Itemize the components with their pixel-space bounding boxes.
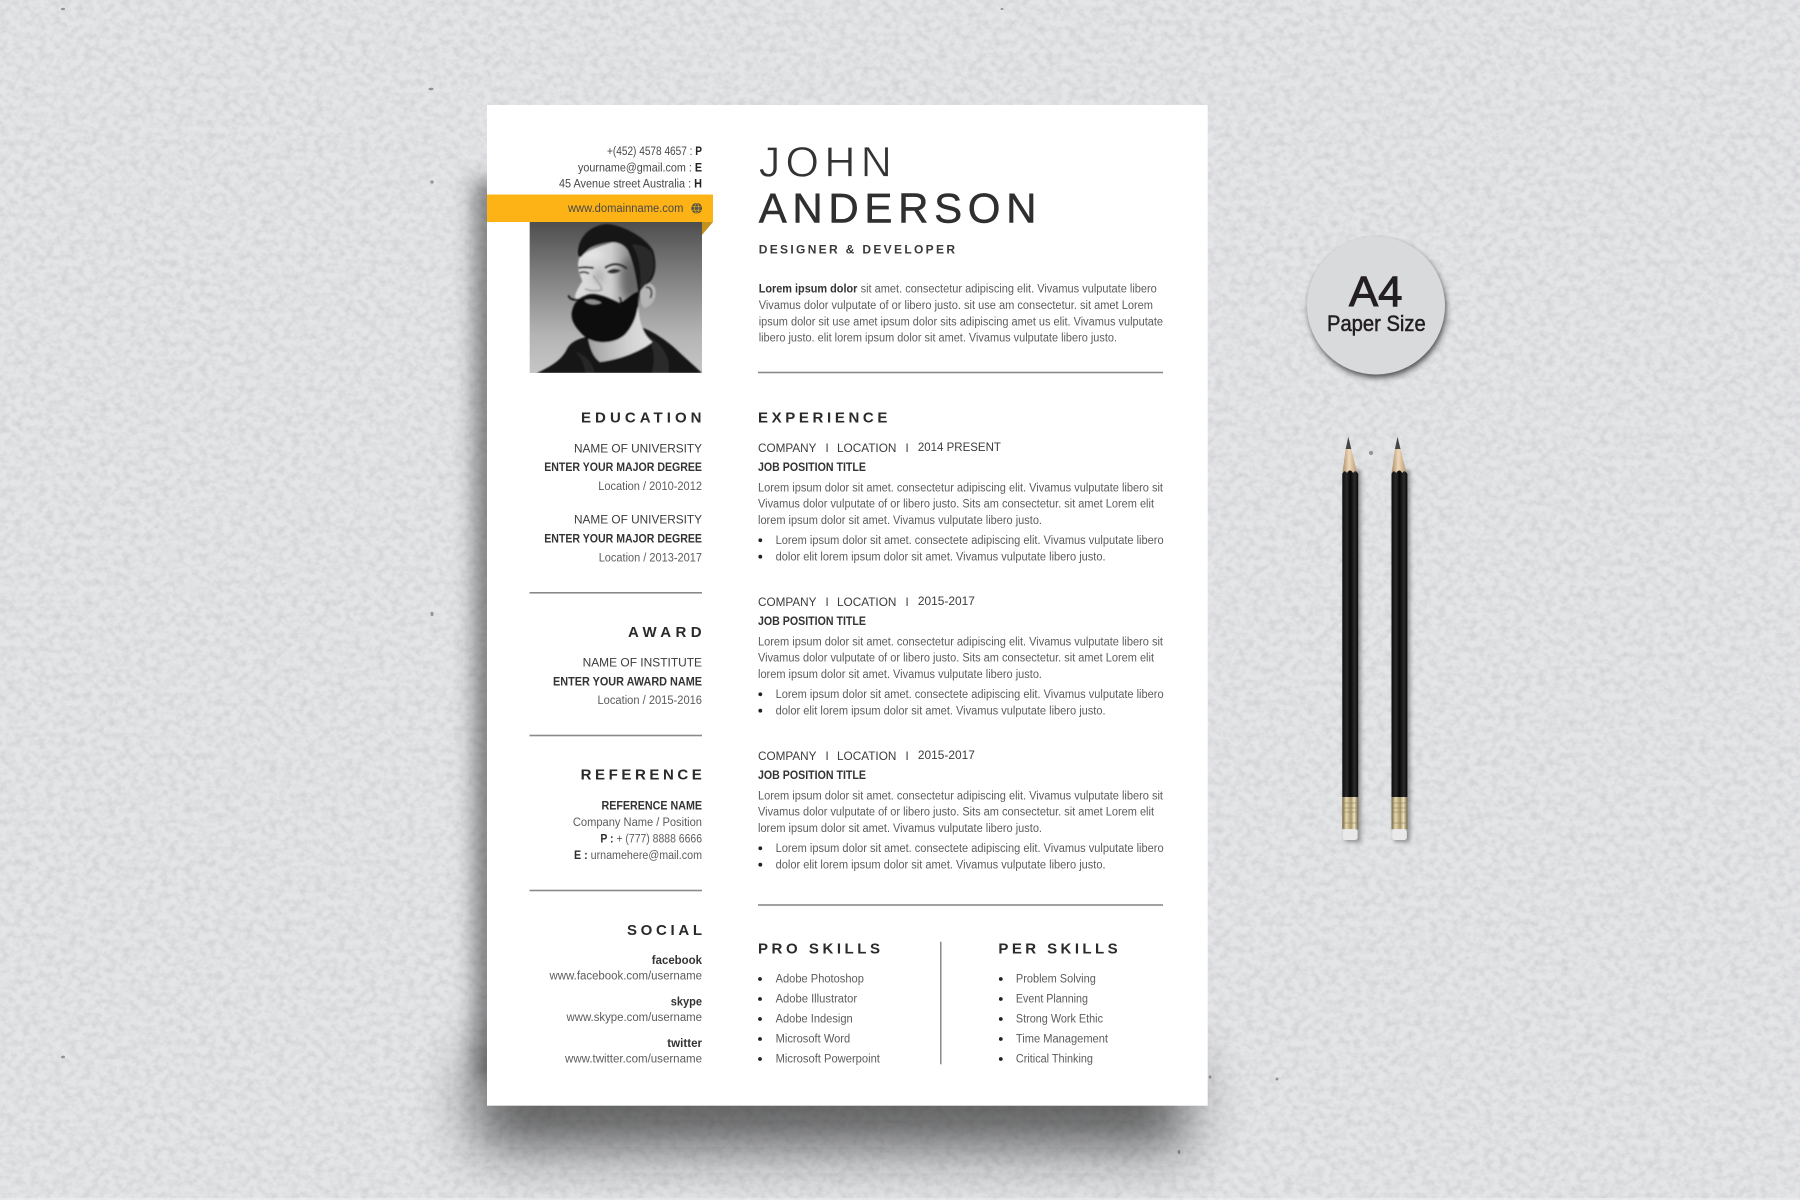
experience entry 3: dolor elit lorem ipsum dolor sit amet. Vivamus vulputate libero justo. <box>776 859 1106 871</box>
per skills list: Critical Thinking <box>1016 1054 1093 1066</box>
social section <box>549 922 703 1066</box>
portrait photo <box>530 222 702 373</box>
experience entry 1: I <box>826 443 829 455</box>
per skills list: Event Planning <box>1016 993 1088 1005</box>
contact details <box>559 146 702 191</box>
paper drop shadow <box>474 180 1186 1147</box>
social section: SOCIAL <box>627 922 702 939</box>
social section: www.skype.com/username <box>566 1012 702 1024</box>
experience entry 2: Lorem ipsum dolor sit amet. consectetur adipiscing elit. Vivamus vulputate libero sit <box>758 636 1164 648</box>
social section: twitter <box>667 1038 703 1050</box>
hoodie <box>537 327 702 373</box>
education section: NAME OF UNIVERSITY <box>574 443 702 455</box>
per skills list: Time Management <box>1016 1033 1109 1045</box>
name heading <box>759 139 1036 232</box>
experience entry 1: dolor elit lorem ipsum dolor sit amet. Vivamus vulputate libero justo. <box>776 551 1106 563</box>
experience entry 1 <box>758 442 1164 563</box>
intro paragraph: ipsum dolor sit use amet ipsum dolor sits adipiscing amet us elit. Vivamus vulputate <box>759 316 1163 328</box>
experience entry 3: I <box>826 751 829 763</box>
A4 paper size badge: Paper Size <box>1327 311 1426 336</box>
education section: ENTER YOUR MAJOR DEGREE <box>544 462 702 474</box>
intro paragraph: libero justo. elit lorem ipsum dolor sit amet. Vivamus vulputate libero justo. <box>759 332 1117 344</box>
experience entry 3: Lorem ipsum dolor sit amet. consectetur adipiscing elit. Vivamus vulputate libero sit <box>758 790 1164 802</box>
experience entry 3: Lorem ipsum dolor sit amet. consectete adipiscing elit. Vivamus vulputate libero <box>776 843 1164 855</box>
reference section: REFERENCE NAME <box>602 800 702 812</box>
social section: www.facebook.com/username <box>549 970 702 982</box>
experience entry 2 <box>758 596 1164 717</box>
ear <box>640 283 656 308</box>
beard and moustache <box>572 292 638 342</box>
experience entry 2: Vivamus dolor vulputate of or libero justo. Sits am consectetur. sit amet Lorem elit <box>758 653 1155 665</box>
experience entry 3: JOB POSITION TITLE <box>758 770 866 782</box>
face <box>575 242 640 331</box>
reference section: E : urnamehere@mail.com <box>574 850 702 862</box>
intro paragraph: Vivamus dolor vulputate of or libero justo. sit use am consectetur. sit amet Lorem <box>759 300 1153 312</box>
yellow ribbon with website: www.domainname.com <box>567 203 683 215</box>
hair <box>578 224 655 300</box>
experience entry 2: I <box>906 597 909 609</box>
education section: EDUCATION <box>581 409 702 426</box>
experience entry 2: dolor elit lorem ipsum dolor sit amet. Vivamus vulputate libero justo. <box>776 705 1106 717</box>
pro skills list: PRO SKILLS <box>758 941 880 958</box>
experience entry 2: I <box>826 597 829 609</box>
experience entry 1: Vivamus dolor vulputate of or libero justo. Sits am consectetur. sit amet Lorem elit <box>758 499 1155 511</box>
reference section: P : + (777) 8888 6666 <box>600 833 702 845</box>
neck <box>588 308 652 362</box>
contact details: yourname@gmail.com : E <box>578 162 702 174</box>
intro paragraph: Lorem ipsum dolor <box>759 284 858 296</box>
award section <box>553 624 702 707</box>
pro skills list: Microsoft Word <box>776 1033 850 1045</box>
reference section: REFERENCE <box>581 767 702 784</box>
reference section <box>573 767 702 862</box>
experience entry 3: Vivamus dolor vulputate of or libero justo. Sits am consectetur. sit amet Lorem elit <box>758 807 1155 819</box>
experience entry 1: lorem ipsum dolor sit amet. Vivamus vulputate libero justo. <box>758 515 1042 527</box>
reference section: Company Name / Position <box>573 817 702 829</box>
experience entry 2: lorem ipsum dolor sit amet. Vivamus vulputate libero justo. <box>758 669 1042 681</box>
per skills list: Strong Work Ethic <box>1016 1014 1103 1026</box>
experience entry 1: 2014 PRESENT <box>918 442 1001 454</box>
name heading: ANDERSON <box>759 185 1036 232</box>
experience entry 2: LOCATION <box>837 597 896 609</box>
social section: facebook <box>652 955 703 967</box>
nose shadow <box>585 275 602 291</box>
experience entry 3 <box>758 750 1164 871</box>
experience entry 1: Lorem ipsum dolor sit amet. consectete adipiscing elit. Vivamus vulputate libero <box>776 535 1164 547</box>
pro skills list: Adobe Photoshop <box>776 974 864 986</box>
A4 paper size badge: A4 <box>1349 268 1402 316</box>
name heading: JOHN <box>759 139 892 187</box>
experience entry 1: I <box>906 443 909 455</box>
experience entry 1: LOCATION <box>837 443 896 455</box>
education section: NAME OF UNIVERSITY <box>574 515 702 527</box>
experience entry 3: LOCATION <box>837 751 896 763</box>
experience entry 2: COMPANY <box>758 597 817 609</box>
experience entry 1: JOB POSITION TITLE <box>758 462 866 474</box>
brows and eyes <box>577 265 594 270</box>
experience heading: EXPERIENCE <box>758 409 887 426</box>
resume sheet <box>487 105 1208 1106</box>
education section: ENTER YOUR MAJOR DEGREE <box>544 533 702 545</box>
experience entry 2: JOB POSITION TITLE <box>758 616 866 628</box>
icon: globe <box>692 204 702 213</box>
intro paragraph: sit amet. consectetur adipiscing elit. Vivamus vulputate libero <box>861 284 1157 296</box>
pro skills list: Microsoft Powerpoint <box>776 1054 881 1066</box>
pro skills list: Adobe Illustrator <box>776 993 857 1005</box>
experience entry 1: COMPANY <box>758 443 817 455</box>
education section: Location / 2013-2017 <box>599 552 702 564</box>
pro skills list: Adobe Indesign <box>776 1014 853 1026</box>
social section: www.twitter.com/username <box>564 1054 702 1066</box>
job title: DESIGNER & DEVELOPER <box>759 242 955 256</box>
per skills list <box>998 941 1118 1066</box>
pencil 1 <box>1342 437 1361 842</box>
experience entry 1: Lorem ipsum dolor sit amet. consectetur adipiscing elit. Vivamus vulputate libero sit <box>758 482 1164 494</box>
award section: NAME OF INSTITUTE <box>583 658 702 670</box>
yellow ribbon with website <box>487 194 713 235</box>
per skills list: Problem Solving <box>1016 974 1096 986</box>
experience entry 2: 2015-2017 <box>918 596 975 608</box>
per skills list: PER SKILLS <box>998 941 1118 958</box>
experience entry 2: Lorem ipsum dolor sit amet. consectete adipiscing elit. Vivamus vulputate libero <box>776 689 1164 701</box>
award section: Location / 2015-2016 <box>598 695 702 707</box>
pencil 2 <box>1392 437 1410 842</box>
experience entry 3: 2015-2017 <box>918 750 975 762</box>
education section <box>544 409 702 564</box>
award section: ENTER YOUR AWARD NAME <box>553 676 702 688</box>
experience entry 3: lorem ipsum dolor sit amet. Vivamus vulputate libero justo. <box>758 823 1042 835</box>
contact details: 45 Avenue street Australia : H <box>559 179 702 191</box>
experience entry 3: I <box>906 751 909 763</box>
social section: skype <box>671 996 702 1008</box>
experience entry 3: COMPANY <box>758 751 817 763</box>
face shading <box>582 249 638 299</box>
education section: Location / 2010-2012 <box>598 481 702 493</box>
intro paragraph <box>759 284 1163 344</box>
award section: AWARD <box>628 624 702 641</box>
contact details: +(452) 4578 4657 : P <box>607 146 702 158</box>
pro skills list <box>758 941 881 1066</box>
A4 paper size badge <box>1307 236 1446 378</box>
